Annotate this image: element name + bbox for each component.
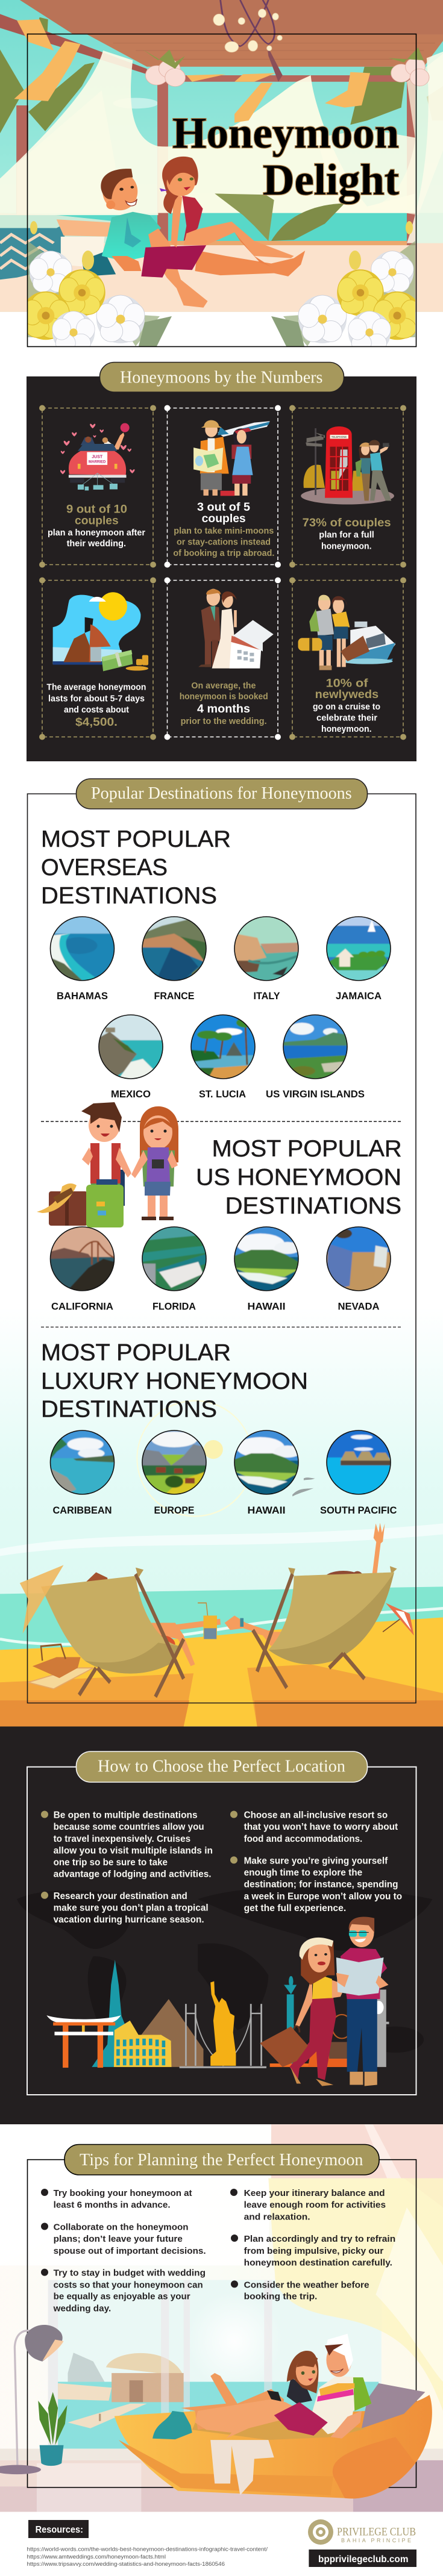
resource links — [27, 2546, 268, 2567]
photo: Europe — [142, 1430, 206, 1494]
stat text: booked 4 months prior: honeymoon is booked — [180, 692, 268, 702]
stat text: 9 out of 10 couples: couples — [75, 514, 119, 528]
heading: most popular US honeymoon destinations — [196, 1136, 402, 1219]
panel: tips for planning the perfect honeymoon — [0, 2124, 443, 2512]
photo: Hawaii — [234, 1227, 301, 1291]
stat text: 10% of newlyweds — [313, 677, 380, 734]
tips list: left column: spouse out of important decisions. — [54, 2246, 206, 2256]
heading: most popular overseas destinations: OVERSEAS — [41, 855, 168, 881]
heading: most popular luxury honeymoon destinations: MOST POPULAR — [41, 1340, 231, 1366]
title: Honeymoon — [172, 108, 399, 157]
tips list: right column: Consider the weather before — [244, 2280, 369, 2290]
stat text: 3 out of 5 couples — [173, 501, 274, 558]
frame — [27, 1767, 416, 2095]
list: right column: Choose an all-inclusive resort so — [244, 1810, 388, 1821]
tips list: right column: from being impulsive, picky our — [244, 2246, 383, 2256]
stat text: booked 4 months prior — [180, 681, 268, 726]
dark panel background — [27, 376, 416, 761]
divider: section two — [41, 1326, 402, 1327]
list: right column: enough time to explore the — [244, 1868, 363, 1878]
icon: just married car: JUST — [92, 455, 103, 460]
heading: most popular US honeymoon destinations: MOST POPULAR — [212, 1136, 402, 1162]
stat card: 10% of newlyweds — [289, 577, 406, 740]
heading pill: location: How to Choose the Perfect Location — [98, 1757, 345, 1776]
heading: most popular US honeymoon destinations: DESTINATIONS — [225, 1193, 401, 1219]
photo: Nevada — [327, 1227, 391, 1291]
photo: US Virgin Islands — [283, 1015, 347, 1079]
tips list: right column — [230, 2188, 395, 2302]
label: Florida: FLORIDA — [152, 1302, 196, 1312]
stat text: average honeymoon cost: The average honeymoon — [46, 683, 146, 693]
label: Italy: ITALY — [253, 991, 280, 1002]
stat text: 10% of newlyweds: celebrate their — [316, 714, 377, 723]
stat card: 73% of couples — [289, 405, 406, 567]
heading pill: destinations: Popular Destinations for Honeymoons — [91, 784, 352, 803]
label: Jamaica: JAMAICA — [336, 991, 382, 1002]
tips list: left column: wedding day. — [53, 2303, 111, 2313]
list: left column: make sure you don’t plan a tropical — [54, 1903, 209, 1913]
stat text: 10% of newlyweds: 10% of — [325, 677, 368, 690]
couple on cabana bed — [82, 157, 305, 308]
heading pill: tips: Tips for Planning the Perfect Honeymoon — [80, 2151, 363, 2169]
stat text: 10% of newlyweds: newlyweds — [315, 688, 379, 701]
label: Hawaii (US): HAWAII — [247, 1302, 286, 1312]
stat text: average honeymoon cost — [46, 683, 146, 729]
illustration: couple on bed — [115, 2334, 432, 2498]
illustration: lamp and plant — [0, 2325, 68, 2474]
tips list: left column: Try booking your honeymoon at — [54, 2188, 192, 2198]
stat text: booked 4 months prior: 4 months — [197, 703, 250, 716]
title: Delight — [263, 155, 399, 204]
stat text: 3 out of 5 couples: 3 out of 5 — [197, 501, 250, 514]
illustration: couple with map — [260, 1917, 389, 2086]
panel: popular destinations — [20, 779, 416, 1703]
icon: bride, groom and calendar — [198, 589, 274, 669]
list: left column: allow you to visit multiple islands in — [54, 1845, 213, 1856]
title — [172, 108, 399, 204]
icon: just married car: MARRIED — [89, 460, 106, 464]
panel: how to choose the perfect location — [0, 1726, 443, 2124]
room background scene — [0, 2124, 443, 2512]
dark background with world map — [0, 1726, 443, 2124]
list: right column: that you won’t have to worry about — [244, 1822, 398, 1832]
resource links: https://www.tripsavvy.com/wedding-statistics-and-honeymoon-facts-1860546 — [27, 2561, 225, 2567]
panel: honeymoons by the numbers — [27, 363, 416, 761]
list: right column: Make sure you’re giving yourself — [244, 1856, 388, 1866]
panel: popular destinations background beach — [0, 1307, 443, 1726]
stat card: average honeymoon cost — [39, 577, 156, 740]
tips list: right column: Plan accordingly and try to refrain — [244, 2234, 395, 2244]
stat text: 9 out of 10 couples — [48, 504, 145, 549]
logo: Privilege Club: BAHIA PRINCIPE — [341, 2537, 411, 2543]
list: left column — [41, 1810, 213, 1925]
stat text: average honeymoon cost: and costs about — [64, 705, 129, 715]
stat card: booked 4 months prior — [164, 577, 281, 740]
photo: Bahamas — [51, 917, 115, 981]
icon: couple at sunset with money — [53, 592, 148, 671]
illustration: world landmarks — [46, 1960, 389, 2068]
resource links: https://www.amtweddings.com/honeymoon-facts.html — [27, 2554, 166, 2560]
stat text: booked 4 months prior: prior to the wedding. — [181, 717, 267, 726]
label: US Virgin Islands: US VIRGIN ISLANDS — [266, 1089, 365, 1100]
stat text: 3 out of 5 couples: of booking a trip abroad. — [173, 549, 274, 558]
heading pill: tips — [64, 2144, 379, 2175]
photo: Caribbean — [51, 1430, 115, 1494]
frame — [28, 794, 416, 1703]
label: Europe: EUROPE — [154, 1505, 194, 1516]
heading: most popular overseas destinations: DESTINATIONS — [41, 883, 217, 909]
heading pill: location — [76, 1751, 368, 1782]
resources label — [28, 2520, 89, 2538]
list: left column: advantage of lodging and activities. — [54, 1870, 212, 1880]
label: Caribbean: CARIBBEAN — [53, 1505, 112, 1516]
tips list: right column: booking the trip. — [244, 2292, 317, 2302]
resource links: https://world-words.com/the-worlds-best-honeymoon-destinations-infographic-travel-content/ — [27, 2546, 268, 2553]
logo: Privilege Club — [308, 2519, 416, 2545]
tips list: left column: plans; don’t leave your future — [54, 2234, 183, 2244]
heading pill: destinations — [76, 779, 368, 809]
list: left column: vacation during hurricane season. — [54, 1915, 204, 1925]
list: right column: destination; for instance, spending — [244, 1880, 398, 1890]
tips list: left column: be equally as enjoyable as your — [54, 2292, 190, 2302]
list: left column: one trip so be sure to take — [54, 1857, 168, 1868]
label: Nevada: NEVADA — [338, 1302, 380, 1312]
label: Mexico: MEXICO — [111, 1089, 151, 1100]
heading: most popular overseas destinations: MOST POPULAR — [41, 826, 231, 852]
photo: Jamaica — [327, 917, 391, 981]
tips list: left column: Try to stay in budget with wedding — [54, 2268, 206, 2278]
photo: Hawaii (luxury) — [234, 1430, 301, 1494]
photo: Italy — [234, 917, 298, 981]
website: bpprivilegeclub.com — [318, 2554, 409, 2565]
stat text: 9 out of 10 couples: 9 out of 10 — [66, 504, 127, 516]
heading pill: numbers — [100, 363, 344, 392]
list: right column: get the full experience. — [244, 1903, 346, 1913]
stat text: average honeymoon cost: $4,500. — [75, 716, 118, 729]
label: St. Lucia: ST. LUCIA — [199, 1089, 246, 1100]
stat text: 73% of couples — [303, 517, 391, 552]
stat text: 73% of couples: honeymoon. — [321, 542, 371, 552]
icon: travellers with map and plane — [193, 420, 270, 496]
photo: Mexico — [99, 1015, 163, 1079]
stat text: 9 out of 10 couples: plan a honeymoon after — [48, 528, 145, 538]
stat text: 73% of couples: 73% of couples — [303, 517, 391, 529]
list: left column: Be open to multiple destinations — [54, 1810, 198, 1821]
heading: most popular overseas destinations — [41, 826, 231, 909]
tips list: left column: least 6 months in advance. — [54, 2200, 171, 2210]
photo: California — [51, 1227, 115, 1291]
tips list: left column: costs so that your honeymoon can — [54, 2280, 203, 2290]
stat text: 9 out of 10 couples: their wedding. — [67, 539, 126, 549]
illustration: couple in beach chairs — [20, 1477, 414, 1697]
icon: phone booth and couple — [301, 426, 394, 504]
heading: most popular US honeymoon destinations: US HONEYMOON — [196, 1165, 401, 1190]
footer: resources — [27, 2519, 416, 2567]
photo: France — [142, 917, 206, 981]
label: France: FRANCE — [154, 991, 194, 1002]
hero background scene — [0, 0, 443, 312]
hero flowers — [22, 221, 421, 354]
stat text: 10% of newlyweds: go on a cruise to — [313, 702, 380, 712]
heading: most popular luxury honeymoon destinations: LUXURY HONEYMOON — [41, 1368, 308, 1394]
heading: most popular luxury honeymoon destinations — [41, 1340, 308, 1423]
resources label: Resources: — [36, 2525, 83, 2535]
logo: Privilege Club: PRIVILEGE CLUB — [337, 2526, 416, 2538]
stat card: 9 out of 10 couples — [39, 405, 156, 567]
icon: just married car — [60, 423, 135, 490]
list: right column — [230, 1810, 402, 1913]
stat text: booked 4 months prior: On average, the — [191, 681, 256, 691]
list: left column: because some countries allow you — [54, 1822, 204, 1832]
frame — [28, 2160, 416, 2487]
label: California: CALIFORNIA — [51, 1302, 113, 1312]
photo: Florida — [142, 1227, 206, 1291]
label: Hawaii (luxury): HAWAII — [247, 1505, 286, 1516]
stat text: 73% of couples: plan for a full — [319, 531, 374, 540]
divider: section one — [41, 1121, 402, 1122]
tips list: right column: and relaxation. — [244, 2212, 310, 2222]
icon: couple with cruise ship — [298, 595, 395, 670]
heading: most popular luxury honeymoon destinations: DESTINATIONS — [41, 1397, 217, 1423]
hero frame — [28, 34, 416, 347]
heading pill: numbers: Honeymoons by the Numbers — [120, 369, 323, 387]
list: left column: Research your destination and — [54, 1891, 187, 1901]
photo: South Pacific — [327, 1430, 391, 1494]
tips list: right column: Keep your itinerary balance and — [244, 2188, 385, 2198]
illustration: backpacker couple with luggage — [37, 1102, 178, 1227]
tips list: left column: Collaborate on the honeymoon — [54, 2222, 189, 2232]
website — [309, 2549, 416, 2567]
stat text: 3 out of 5 couples: couples — [202, 513, 246, 525]
list: right column: food and accommodations. — [244, 1834, 362, 1844]
list: left column: to travel inexpensively. Cruises — [54, 1834, 190, 1844]
stat text: 3 out of 5 couples: plan to take mini-moons — [174, 526, 274, 536]
label: South Pacific: SOUTH PACIFIC — [320, 1505, 397, 1516]
stat text: 10% of newlyweds: honeymoon. — [321, 725, 371, 734]
list: right column: a week in Europe won’t allow you to — [244, 1891, 402, 1901]
tips list: left column — [41, 2188, 206, 2313]
stat card: 3 out of 5 couples — [164, 405, 281, 567]
tips list: right column: leave enough room for activities — [244, 2200, 386, 2210]
tips list: right column: honeymoon destination carefully. — [244, 2257, 392, 2268]
icon: phone booth and couple: TELEPHONE — [331, 435, 347, 438]
photo: St. Lucia — [191, 1015, 255, 1079]
panel: hero illustration — [0, 0, 443, 354]
label: Bahamas: BAHAMAS — [57, 991, 108, 1002]
stat text: average honeymoon cost: lasts for about 5-7 days — [48, 694, 145, 703]
stat text: 3 out of 5 couples: or stay-cations instead — [177, 537, 271, 547]
